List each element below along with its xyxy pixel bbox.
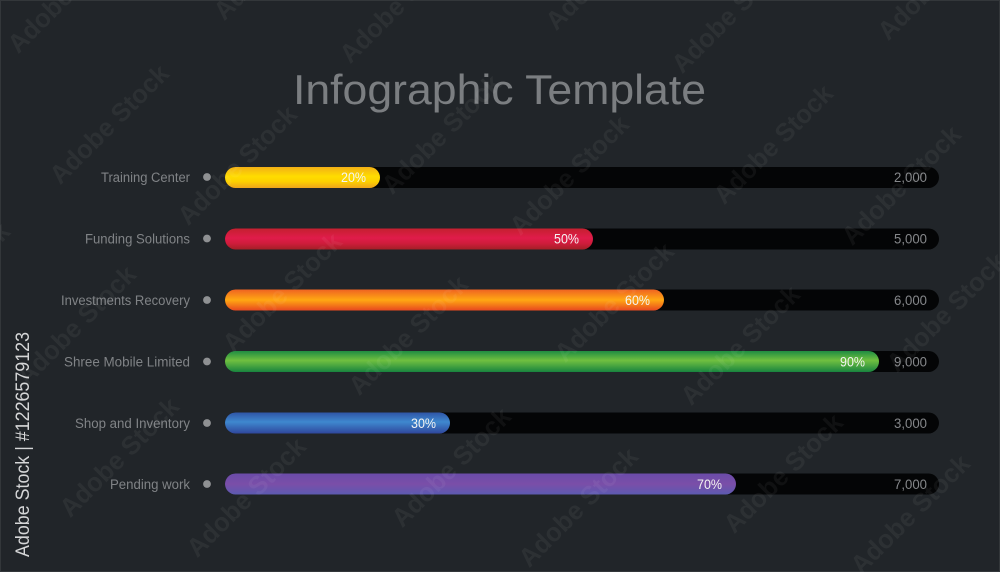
watermark pattern: Adobe Stock (707, 78, 839, 210)
row: Shree Mobile Limited 90% (64, 351, 939, 372)
row: Investments Recovery 60%: 60% (625, 293, 650, 308)
watermark pattern: Adobe Stock (10, 259, 142, 391)
row: Shree Mobile Limited 90%: 90% (840, 354, 865, 370)
watermark pattern: Adobe Stock (342, 269, 474, 401)
row: Training Center 20%: 20% (341, 170, 366, 185)
watermark pattern: Adobe Stock (53, 391, 185, 523)
watermark pattern: Adobe Stock (503, 109, 635, 241)
row: Funding Solutions 50%: 50% (554, 232, 579, 246)
row: Investments Recovery 60%: 6,000 (894, 293, 927, 308)
row: Pending work 70%: Pending work (110, 477, 190, 492)
row: Investments Recovery 60%: Investments Recovery (61, 293, 190, 308)
row: Shop and Inventory 30% (75, 412, 939, 434)
row: Pending work 70% (110, 474, 939, 494)
side watermark label: Adobe Stock | #1226579123 (13, 332, 34, 557)
watermark pattern: Adobe Stock (216, 226, 348, 358)
row: Investments Recovery 60% (61, 290, 939, 310)
title: Infographic Template (293, 66, 706, 113)
watermark pattern: Adobe Stock (375, 68, 507, 200)
row: Funding Solutions 50% (85, 228, 939, 250)
row: Shree Mobile Limited 90%: 9,000 (894, 354, 927, 370)
watermark pattern: Adobe Stock (717, 407, 849, 539)
watermark pattern: Adobe Stock (674, 279, 806, 411)
watermark pattern: Adobe Stock (835, 119, 967, 251)
row: Training Center 20% (101, 167, 939, 188)
watermark pattern: Adobe Stock (512, 441, 644, 572)
row: Shree Mobile Limited 90%: Shree Mobile Limited (64, 354, 190, 370)
watermark pattern: Adobe Stock (180, 431, 312, 563)
watermark pattern: Adobe Stock (43, 58, 175, 190)
row: Shop and Inventory 30%: Shop and Inventory (75, 416, 190, 431)
watermark pattern: Adobe Stock (548, 236, 680, 368)
watermark pattern: Adobe Stock (385, 401, 517, 533)
row: Pending work 70%: 70% (697, 477, 722, 492)
row: Funding Solutions 50%: 5,000 (894, 232, 927, 246)
row: Shop and Inventory 30%: 3,000 (894, 416, 927, 431)
row: Shop and Inventory 30%: 30% (411, 416, 436, 431)
row: Pending work 70%: 7,000 (894, 477, 927, 492)
row: Training Center 20%: 2,000 (894, 170, 927, 185)
watermark pattern: Adobe Stock (171, 99, 303, 231)
row: Training Center 20%: Training Center (101, 170, 190, 185)
row: Funding Solutions 50%: Funding Solutions (85, 232, 190, 246)
